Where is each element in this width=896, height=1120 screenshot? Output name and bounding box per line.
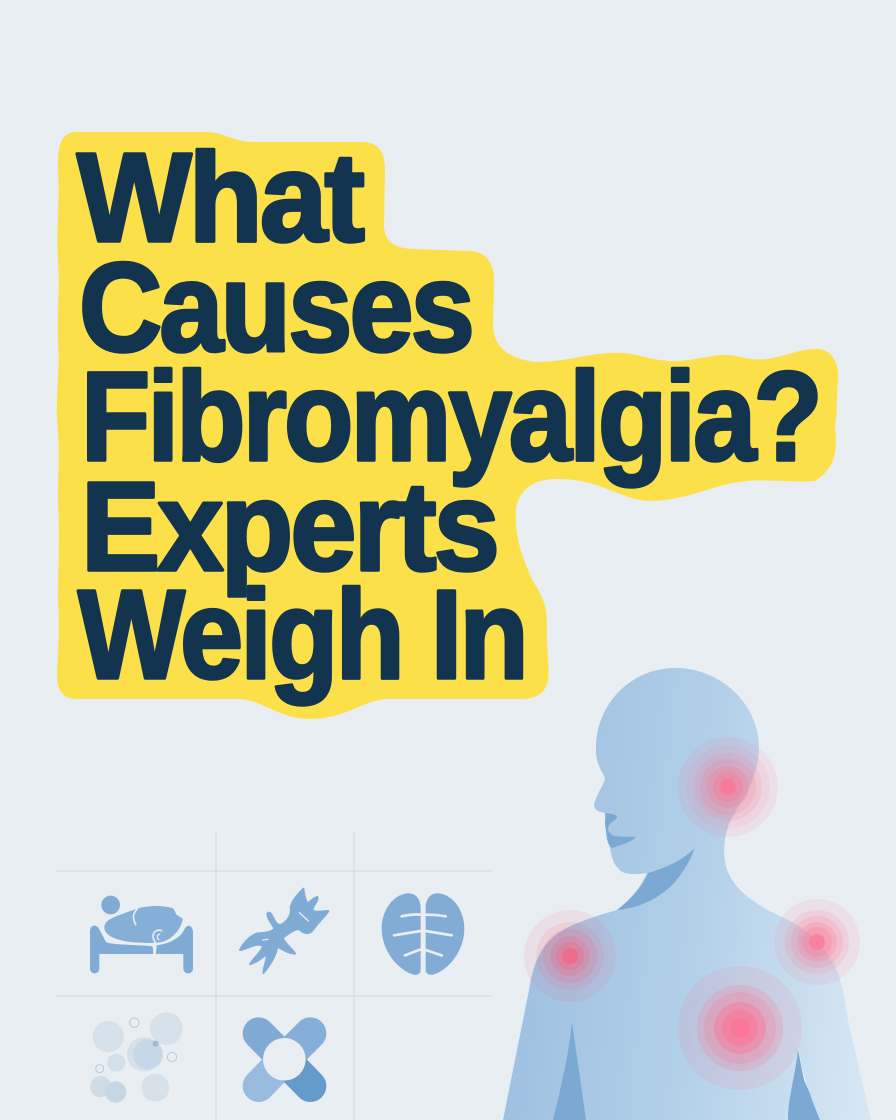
neck shadow [617,848,695,910]
icon: person lying in bed [90,896,193,973]
title: Experts [81,456,497,597]
title [77,127,820,705]
mouth and nose shadow [605,813,636,848]
body [503,668,871,1120]
pain point: chest [678,966,802,1090]
icon: bubbles [90,1012,183,1103]
pain point: head [678,737,778,837]
icon: lungs or brain shape [382,893,464,975]
title: What [77,127,364,268]
title: Fibromyalgia? [81,346,820,487]
pain point: left shoulder [524,910,616,1002]
title: Weigh In [78,564,526,705]
pain point: right shoulder [774,899,860,985]
icon: jagged nerve cell [240,889,328,973]
human silhouette [503,668,871,1120]
icon grid lines [56,832,492,1120]
yellow title backdrop [57,132,838,719]
icon: crossed bandages [259,1033,310,1086]
title: Causes [79,237,472,378]
underarm shadows [548,1015,822,1120]
